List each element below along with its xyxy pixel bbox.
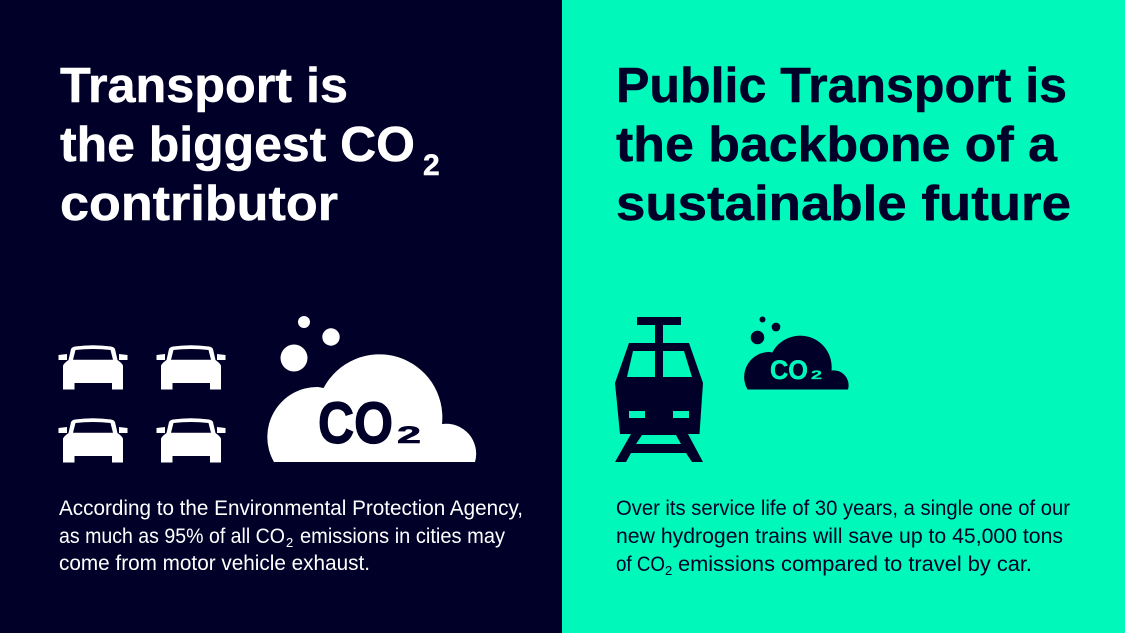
right heading: the backbone of a [616,118,1058,172]
right body text: new hydrogen trains will save up to 45,000 tons [616,525,1063,548]
right body text: Over its service life of 30 years, a single one of our [616,497,1070,520]
icon: large CO2 cloud: CO [318,391,393,456]
right heading [616,59,1071,231]
right body text: 2 [665,563,672,578]
left body text: According to the Environmental Protection Agency, [59,497,523,520]
right panel background [562,0,1125,633]
left body text: 2 [286,535,293,550]
right heading: Public Transport is [616,59,1067,113]
icon: small CO2 cloud: 2 [811,368,823,382]
icon: large CO2 cloud: 2 [397,422,421,449]
left heading: 2 [423,149,440,182]
icon: tram front view [615,317,703,462]
right body text: emissions compared to travel by car. [678,553,1032,576]
right body text [616,497,1070,578]
left heading: contributor [60,177,338,231]
left heading [60,59,440,231]
icon: large CO2 cloud [267,316,476,462]
left body text: emissions in cities may [300,525,505,548]
right body text: of CO [616,553,665,576]
left body text [59,497,523,575]
icon: four cars [58,345,226,462]
icon: small CO2 cloud [744,316,849,390]
left heading: Transport is [60,59,348,113]
left body text: come from motor vehicle exhaust. [59,552,370,575]
left body text: as much as 95% of all CO [59,525,285,548]
left heading: the biggest CO [60,118,415,172]
right heading: sustainable future [616,177,1071,231]
left panel background [0,0,562,633]
icon: small CO2 cloud: CO [770,355,808,385]
